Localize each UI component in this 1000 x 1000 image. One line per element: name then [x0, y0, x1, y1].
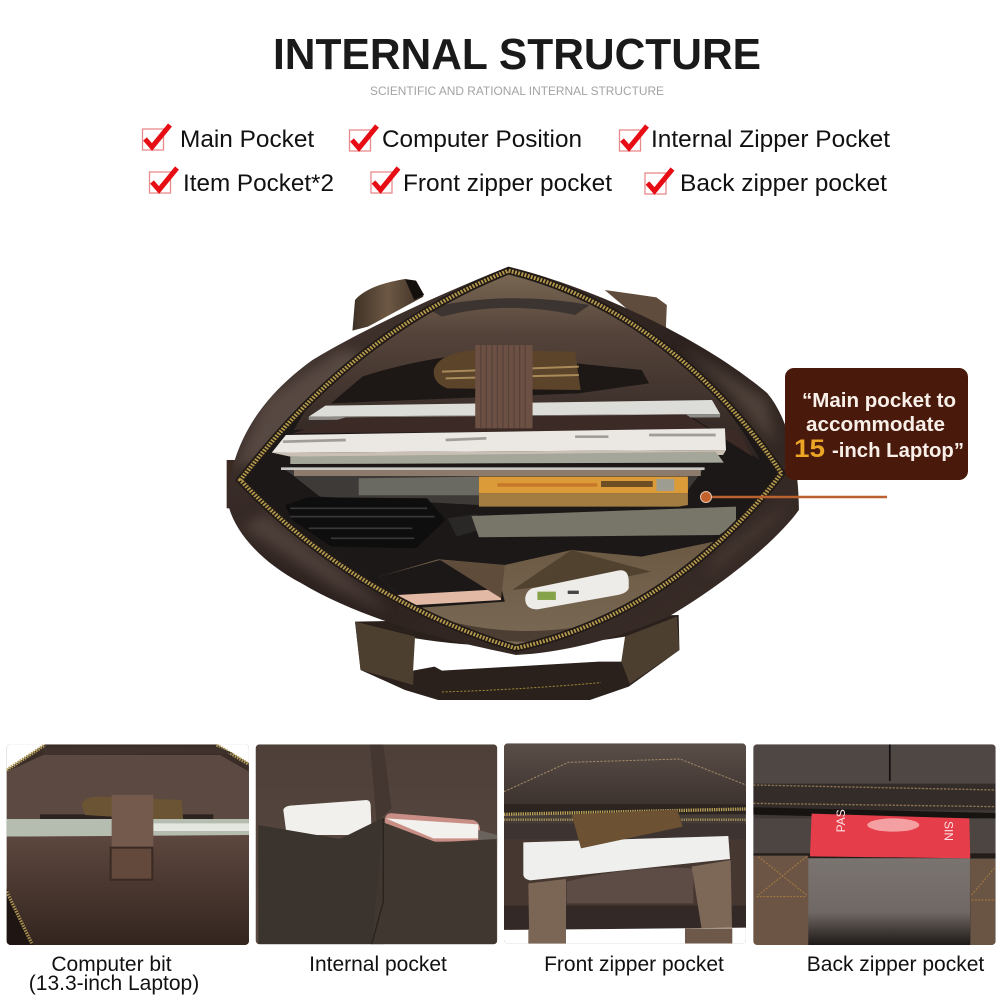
organiser pocket with wallet — [331, 350, 649, 403]
callout: 15-inch laptop: accommodate — [806, 414, 945, 436]
side buckle — [227, 460, 239, 508]
caption: computer bit: (13.3-inch Laptop) — [29, 972, 199, 995]
grey slab under books — [281, 467, 705, 505]
black leather wallet — [285, 497, 479, 548]
caption: front zipper pocket: Front zipper pocket — [544, 953, 724, 976]
title: INTERNAL STRUCTURE — [273, 30, 761, 79]
photo: back zipper pocket: SIN — [941, 821, 955, 841]
caption: computer bit: Computer bit — [51, 953, 172, 976]
caption: internal pocket: Internal pocket — [309, 953, 447, 976]
main photo: open briefcase — [220, 260, 812, 700]
callout: 15-inch laptop — [785, 368, 968, 480]
sleeve fabric — [292, 415, 753, 457]
interior — [246, 274, 776, 644]
front lining — [379, 542, 714, 644]
check item: Front zipper pocket: Front zipper pocket — [403, 170, 612, 197]
top handles — [352, 279, 667, 332]
photo: internal pocket — [256, 744, 497, 944]
orange book spine — [479, 477, 688, 507]
leather body — [227, 267, 799, 655]
subtitle: SCIENTIFIC AND RATIONAL INTERNAL STRUCTURE — [370, 84, 664, 98]
power bank pocket — [512, 550, 651, 609]
photo: back zipper pocket — [753, 744, 996, 945]
bottom handle — [355, 615, 679, 700]
zipper — [240, 271, 782, 648]
photo: front zipper pocket — [504, 743, 746, 944]
photo: computer bit — [7, 744, 249, 945]
feature checklist — [142, 125, 890, 197]
callout: 15-inch laptop: 15 — [794, 435, 825, 463]
lining seam — [455, 622, 572, 642]
photo: back zipper pocket: PAS — [834, 809, 848, 832]
phone pocket — [379, 560, 505, 608]
grey book spine — [359, 477, 479, 495]
caption: back zipper pocket: Back zipper pocket — [807, 953, 984, 976]
caption: computer bit — [29, 953, 199, 995]
top lining — [294, 267, 760, 460]
check item: Back zipper pocket: Back zipper pocket — [680, 170, 887, 197]
check item: Computer Position: Computer Position — [382, 126, 582, 153]
check item: Item Pocket*2: Item Pocket*2 — [183, 170, 334, 197]
check item: Main Pocket: Main Pocket — [180, 126, 314, 153]
laptop edge — [309, 400, 720, 417]
grey laptop — [472, 507, 736, 537]
callout leader line — [700, 492, 887, 502]
check item: Internal Zipper Pocket: Internal Zipper Pocket — [651, 126, 890, 153]
callout: 15-inch laptop: “Main pocket to — [802, 390, 956, 412]
elastic strap — [475, 345, 533, 428]
white book — [272, 428, 726, 464]
callout: 15-inch laptop: -inch Laptop” — [832, 440, 964, 462]
